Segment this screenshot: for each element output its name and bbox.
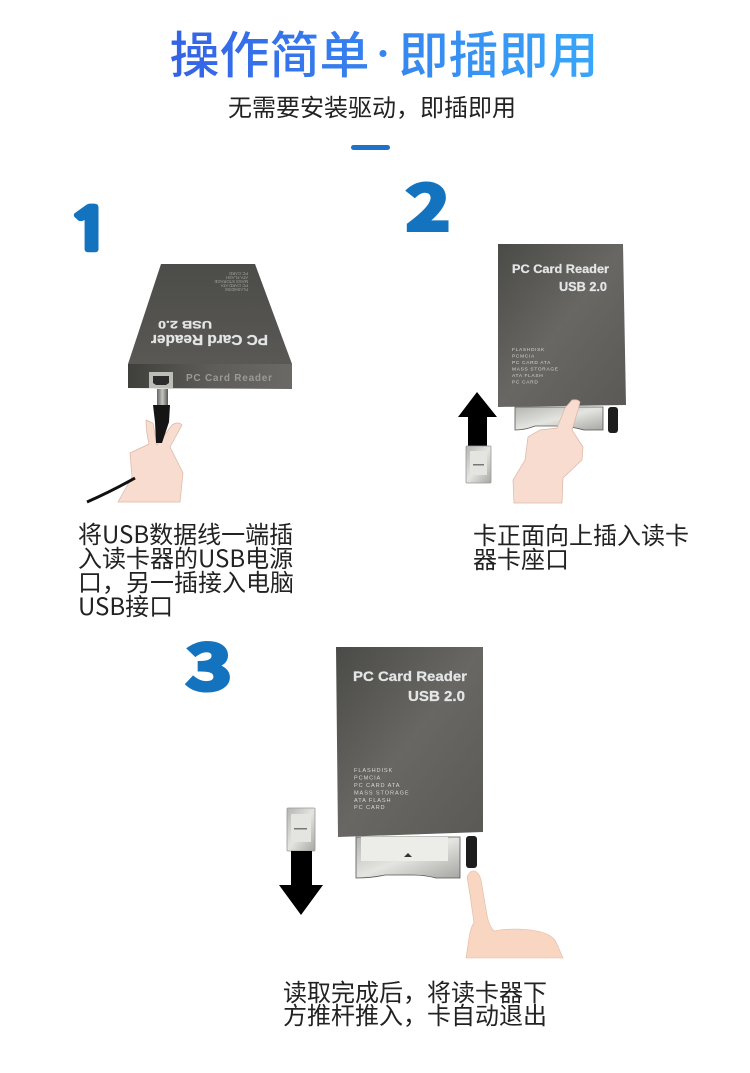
up arrow [458,392,497,447]
step 1 text [78,515,294,622]
subtitle: 无需要安装驱动，即插即用 [228,88,516,123]
title: 操作简单 [170,16,370,88]
feature list: PC CARD ATA [354,783,400,789]
feature list: MASS STORAGE [512,366,559,372]
USB label: USB 2.0 [408,689,465,705]
USB black plug [153,405,170,443]
hand [118,420,183,502]
product label: PC Card Reader [512,262,609,276]
feature list: FLASHDISK [354,768,393,774]
step 3 text: 读取完成后，将读卡器下 [283,973,547,1008]
small card [466,446,491,483]
accent bar [351,145,390,150]
USB port [149,372,173,388]
step 2 text [473,516,689,575]
feature list: PC CARD ATA [512,360,551,366]
upside-down feature list: PC CARD [229,271,248,276]
PC card in slot [515,407,603,430]
reader body [336,647,483,837]
upside-down feature list: FLASHDISK [225,287,248,292]
step 1 text: 口，另一插接入电脑 [78,563,294,598]
feature list: PCMCIA [512,354,535,360]
card logo mark [404,853,412,857]
step 2 number: 2 [406,158,450,248]
upside-down product label: PC Card Reader [151,331,268,347]
feature list: FLASHDISK [512,347,545,353]
step 1 text: 入读卡器的USB电源 [78,539,293,574]
USB label: USB 2.0 [559,280,607,294]
step 2 text: 器卡座口 [473,540,569,575]
reader body [498,244,626,407]
eject tab [466,836,477,868]
feature list: ATA FLASH [512,373,543,379]
upside-down feature list: ATA FLASH [226,275,248,280]
feature list: MASS STORAGE [354,790,409,796]
hand [513,400,583,503]
PC card in slot [356,837,460,878]
cable [87,478,135,502]
step 2 illustration: card insertion [458,244,626,503]
feature list: PC CARD [512,380,538,386]
upside-down feature list: PC CARD ATA [220,283,248,288]
feature list: PCMCIA [354,776,381,782]
reader front face [128,364,292,389]
feature list [512,347,559,386]
pointing hand [466,871,563,958]
step 3 number: 3 [186,619,232,708]
step 3 illustration: card ejection [279,647,563,958]
title [170,16,598,88]
small card [287,808,315,851]
reader top face [128,264,292,364]
step 2 text: 卡正面向上插入读卡 [473,516,689,551]
step 1 text: USB接口 [78,587,173,622]
USB metal plug [157,389,168,406]
step 1 illustration: reader with USB cable and hand [87,264,292,502]
down arrow [279,851,323,915]
step 3 text [283,973,547,1031]
front label: PC Card Reader [186,373,272,384]
upside-down feature list: MASS STORAGE [214,279,248,284]
step 1 number: 1 [67,202,113,259]
eject tab [608,407,618,433]
step 1 text: 将USB数据线一端插 [78,515,293,550]
feature list: ATA FLASH [354,798,391,804]
feature list: PC CARD [354,805,385,811]
title: 即插即用 [398,16,598,88]
upside-down feature list [214,271,248,292]
title: · [368,30,398,74]
feature list [354,768,409,811]
product label: PC Card Reader [353,668,468,684]
card label [361,837,448,861]
step 3 text: 方推杆推入，卡自动退出 [283,996,547,1031]
upside-down USB label: USB 2.0 [158,318,212,330]
